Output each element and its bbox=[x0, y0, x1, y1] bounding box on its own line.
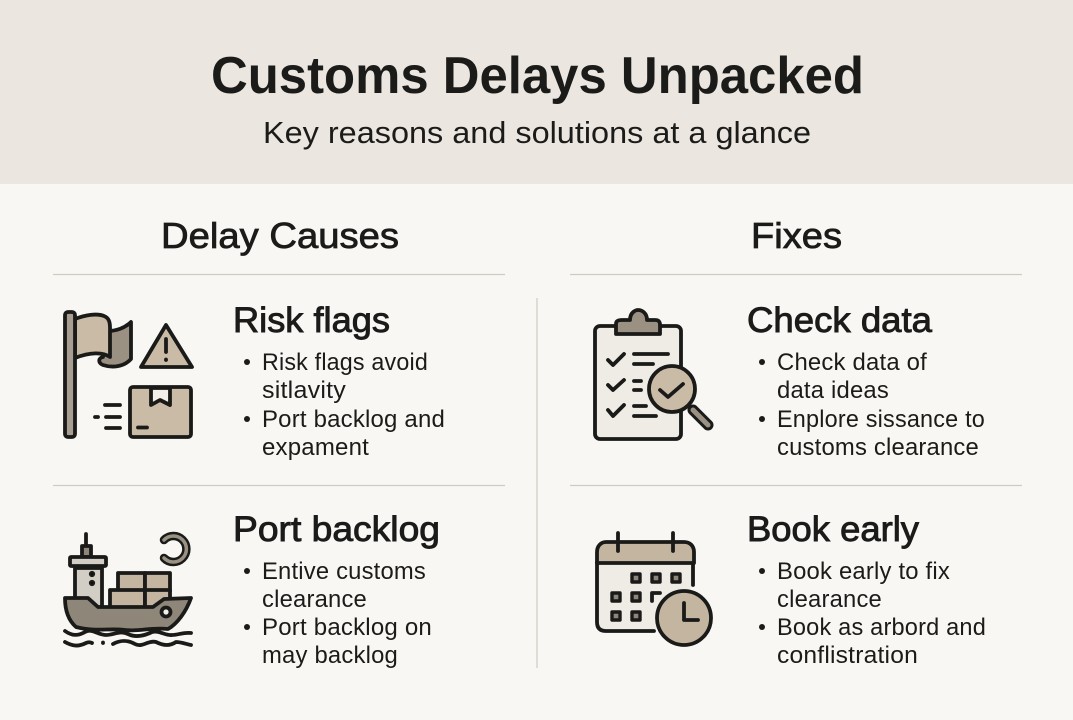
heading: Fixes: Fixes bbox=[751, 215, 842, 256]
bullet list: Port backlog and bbox=[262, 406, 445, 433]
bullet list: Check data of bbox=[777, 349, 927, 376]
bullet list: Enplore sissance to bbox=[777, 406, 985, 433]
subtitle: Key reasons and solutions at a glance bbox=[263, 115, 811, 150]
bullet list: clearance bbox=[262, 586, 367, 613]
icon: calendar and clock bbox=[597, 533, 711, 645]
bullet list: data ideas bbox=[777, 377, 889, 404]
panel: Risk flags bbox=[65, 301, 445, 461]
bullet list: Risk flags avoid bbox=[262, 349, 428, 376]
panel: Port backlog bbox=[65, 510, 440, 669]
bullet list bbox=[244, 349, 445, 461]
heading: Port backlog: Port backlog bbox=[233, 510, 440, 549]
icon: container ship bbox=[65, 534, 191, 646]
heading: Check data: Check data bbox=[747, 301, 933, 340]
heading: Delay Causes: Delay Causes bbox=[161, 215, 399, 256]
bullet list: conflistration bbox=[777, 642, 918, 669]
bullet list: clearance bbox=[777, 586, 882, 613]
bullet list: customs clearance bbox=[777, 434, 979, 461]
bullet list bbox=[759, 558, 986, 669]
icon: clipboard and magnifier bbox=[595, 310, 708, 439]
bullet list: Book as arbord and bbox=[777, 614, 986, 641]
bullet list bbox=[244, 558, 432, 669]
heading: Book early: Book early bbox=[747, 510, 920, 549]
bullet list: may backlog bbox=[262, 642, 398, 669]
bullet list: sitlavity bbox=[262, 377, 346, 404]
bullet list: Book early to fix bbox=[777, 558, 950, 585]
panel: Book early bbox=[597, 510, 986, 669]
bullet list bbox=[759, 349, 985, 461]
panel: Check data bbox=[595, 301, 985, 461]
icon: flag, warning and parcel bbox=[65, 312, 192, 437]
bullet list: expament bbox=[262, 434, 369, 461]
bullet list: Entive customs bbox=[262, 558, 426, 585]
title: Customs Delays Unpacked bbox=[211, 47, 864, 105]
header band bbox=[0, 0, 1073, 184]
bullet list: Port backlog on bbox=[262, 614, 432, 641]
heading: Risk flags: Risk flags bbox=[233, 301, 390, 340]
